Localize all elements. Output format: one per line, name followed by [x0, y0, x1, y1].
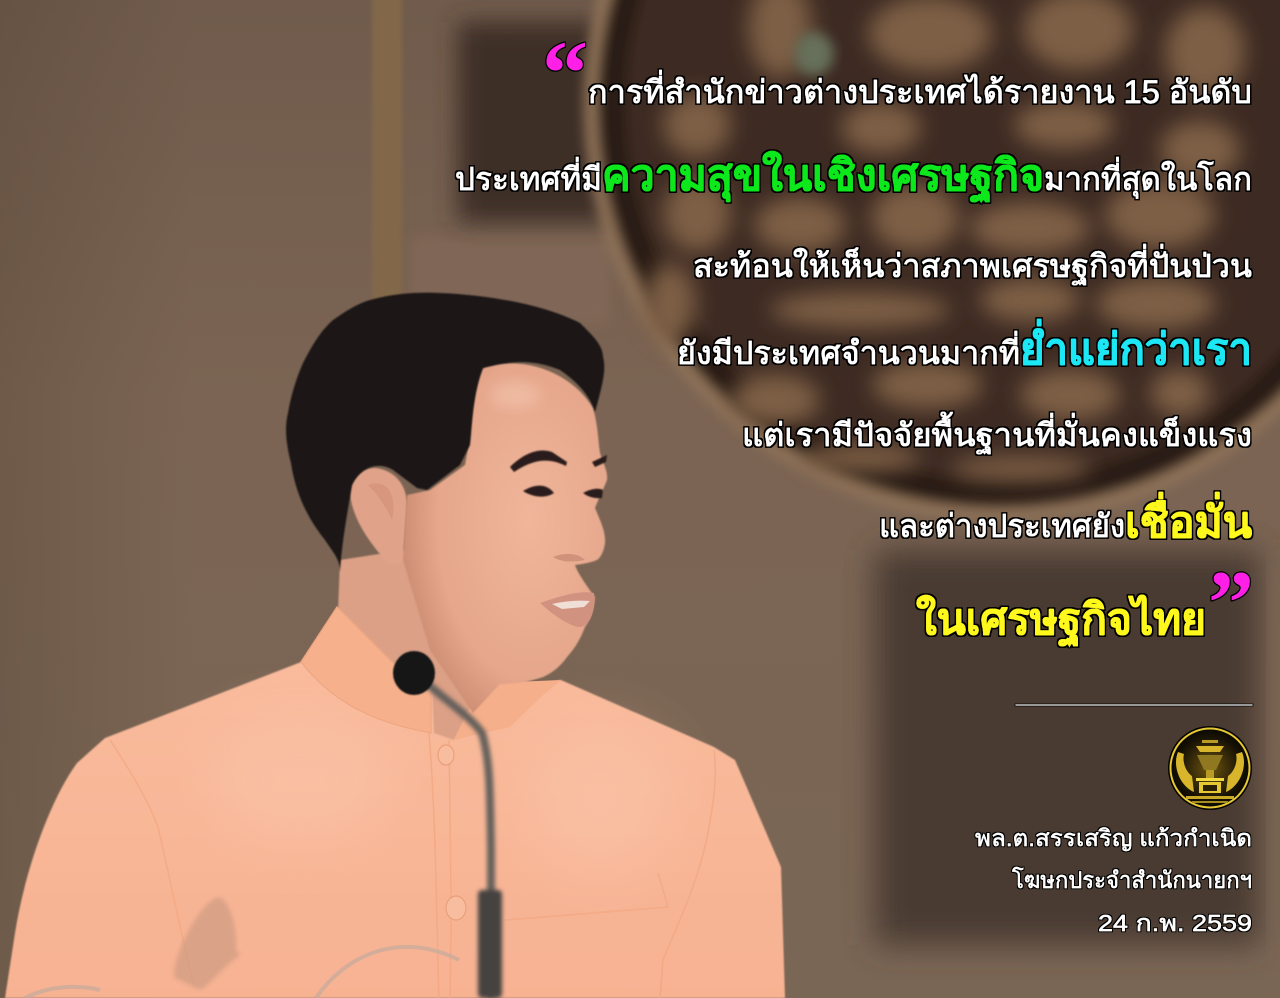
line 4: ย่ำแย่กว่าเรา — [1020, 319, 1252, 374]
speaker role: โฆษกประจำสำนักนายกฯ — [1012, 867, 1252, 893]
line 2 — [455, 150, 1252, 203]
hair — [286, 293, 604, 572]
line 2: มากที่สุดในโลก — [1044, 157, 1252, 199]
dark panel behind credit — [875, 550, 1280, 998]
collar — [301, 607, 431, 733]
blurred government seal in background — [584, 0, 1280, 521]
person — [5, 293, 785, 998]
line 7: ในเศรษฐกิจไทย — [916, 594, 1206, 647]
divider rule — [1015, 704, 1253, 706]
speaker name: พล.ต.สรรเสริญ แก้วกำเนิด — [975, 825, 1252, 851]
sleeve shadow — [174, 897, 240, 990]
neck — [338, 540, 545, 742]
closing quotation mark: ” — [1208, 552, 1254, 654]
jacket seams — [110, 733, 715, 998]
neck gap — [472, 683, 492, 705]
jacket highlights — [210, 720, 670, 870]
line 2: ประเทศที่มี — [455, 157, 602, 197]
jacket — [5, 607, 785, 998]
ear — [350, 468, 407, 565]
lower shadows — [25, 947, 459, 998]
credit text — [975, 825, 1252, 936]
forehead highlight — [490, 381, 540, 409]
jacket buttons — [438, 745, 466, 920]
line 3: สะท้อนให้เห็นว่าสภาพเศรษฐกิจที่ปั่นป่วน — [693, 244, 1252, 286]
face — [403, 363, 607, 713]
microphone stem — [423, 680, 491, 998]
microphone head — [393, 651, 435, 695]
line 4: ยังมีประเทศจำนวนมากที่ — [677, 331, 1020, 371]
line 2: ความสุขในเชิงเศรษฐกิจ — [602, 150, 1044, 203]
line 1: การที่สำนักข่าวต่างประเทศได้รายงาน 15 อันดับ — [588, 70, 1252, 110]
right collar — [454, 680, 561, 740]
line 6: เชื่อมั่น — [1125, 492, 1253, 547]
quote text — [455, 70, 1253, 647]
eyebrows and eyes — [510, 451, 607, 498]
date: 24 ก.พ. 2559 — [1098, 910, 1252, 936]
mouth — [540, 592, 594, 627]
line 5: แต่เรามีปัจจัยพื้นฐานที่มั่นคงแข็งแรง — [742, 412, 1252, 455]
line 4 — [677, 319, 1252, 374]
icon: government seal — [1168, 726, 1252, 810]
line 6: และต่างประเทศยัง — [879, 508, 1125, 544]
opening quotation mark: “ — [542, 22, 588, 124]
nose shade — [553, 554, 585, 562]
line 6 — [879, 492, 1253, 547]
